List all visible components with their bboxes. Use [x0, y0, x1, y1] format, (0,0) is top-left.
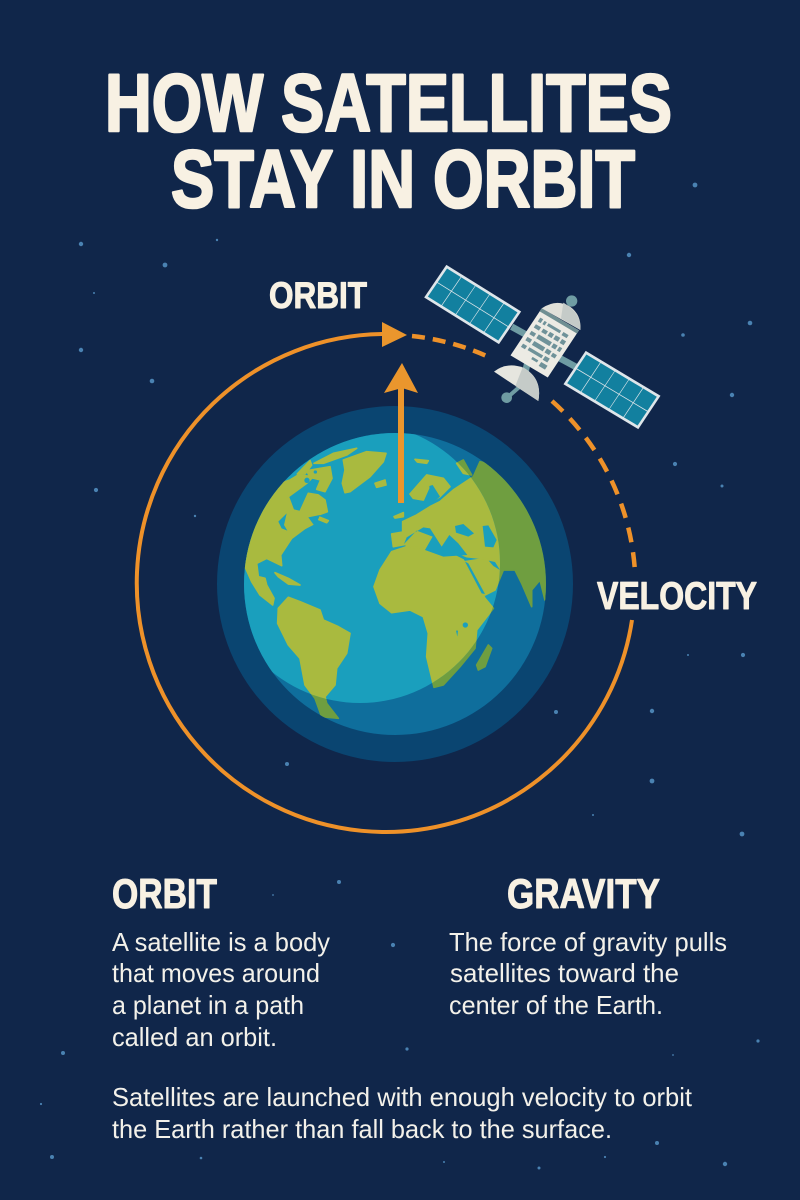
text: gravity description: The force of gravity pulls [449, 927, 727, 957]
right solar panel [564, 351, 660, 429]
text: orbit description: that moves around [112, 958, 320, 988]
star field [40, 183, 760, 1170]
panel: orbit explanation [112, 870, 330, 1052]
text: gravity description [449, 927, 727, 1020]
text: gravity description: center of the Earth. [449, 990, 663, 1020]
top dome [542, 303, 580, 330]
arrow: gravity [384, 363, 418, 503]
text: gravity description: satellites toward the [450, 958, 679, 988]
title [105, 58, 672, 225]
atmosphere halo [217, 406, 573, 762]
left solar panel [424, 265, 521, 344]
heading: gravity: GRAVITY [507, 870, 660, 917]
text: orbit description: called an orbit. [112, 1022, 277, 1052]
text: orbit description [112, 927, 330, 1052]
label: velocity: VELOCITY [597, 575, 757, 618]
dish knob [501, 392, 512, 403]
globe [244, 433, 546, 735]
dish [494, 365, 539, 401]
top antenna knob [566, 295, 577, 307]
text: velocity summary: the Earth rather than fall back to the surface. [112, 1114, 612, 1144]
connector arms [508, 327, 577, 397]
body [510, 308, 579, 377]
orbit path solid arc [137, 334, 632, 832]
arrow: orbit direction [382, 322, 407, 347]
earth with atmosphere [217, 406, 573, 762]
text: velocity summary [112, 1082, 693, 1144]
panel: gravity explanation [449, 870, 727, 1020]
label: orbit: ORBIT [269, 275, 367, 316]
orbit path dashed arc [412, 336, 635, 572]
text: orbit description: a planet in a path [112, 990, 304, 1020]
satellite [424, 265, 660, 429]
text: orbit description: A satellite is a body [112, 927, 330, 957]
heading: orbit: ORBIT [112, 870, 217, 917]
title: STAY IN ORBIT [171, 134, 635, 225]
text: velocity summary: Satellites are launched with enough velocity to orbit [112, 1082, 693, 1112]
